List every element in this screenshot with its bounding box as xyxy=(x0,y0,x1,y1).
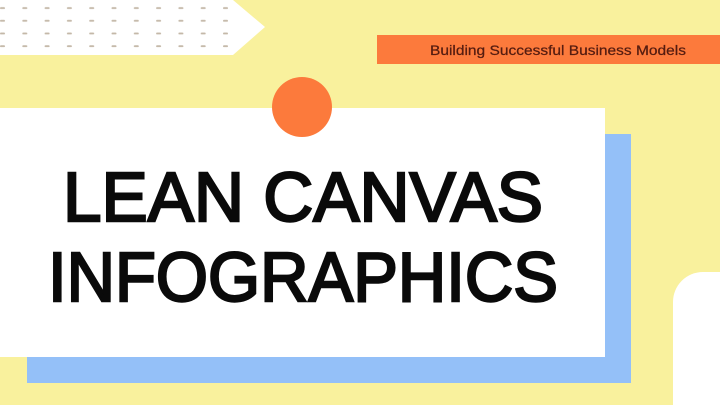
title xyxy=(48,158,558,316)
arrow banner with dot pattern xyxy=(0,0,265,55)
blue offset panel xyxy=(27,134,631,383)
title: INFOGRAPHICS xyxy=(48,238,558,316)
title: LEAN CANVAS xyxy=(63,158,543,236)
orange circle xyxy=(272,77,332,137)
white title panel xyxy=(0,108,605,357)
decorative white rounded panel xyxy=(673,272,720,405)
subtitle banner xyxy=(377,35,720,64)
subtitle banner: Building Successful Business Models xyxy=(430,43,686,58)
